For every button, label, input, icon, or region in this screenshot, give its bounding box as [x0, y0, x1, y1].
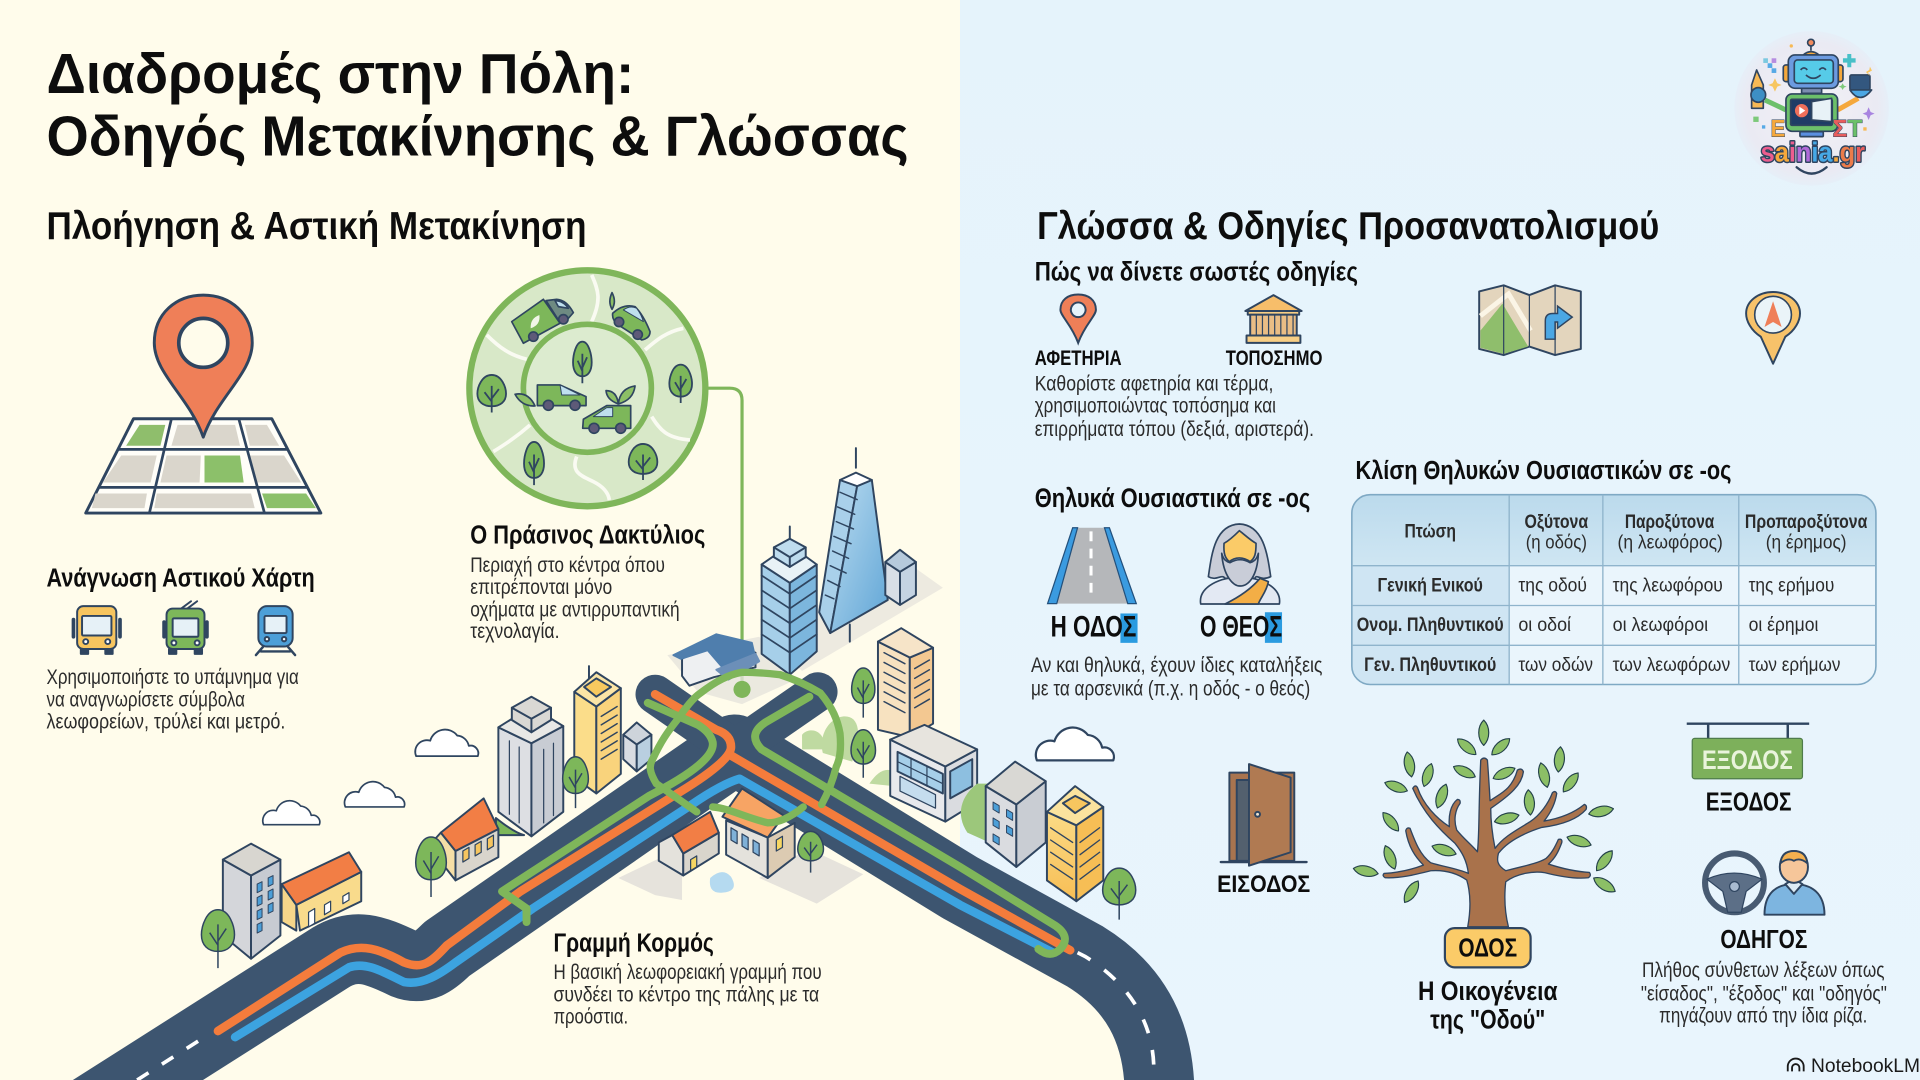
icon: exit sign: ΕΞΟΔΟΣ [1702, 745, 1793, 775]
building: grey tower [498, 697, 563, 836]
heading: green ring: Ο Πράσινος Δακτύλιος [470, 522, 705, 550]
label: landmark: ΤΟΠΟΣΗΜΟ [1226, 347, 1322, 370]
table header: Παροξύτονα [1625, 511, 1714, 533]
table row: nominative plural: οι οδοί [1518, 614, 1572, 636]
label: start: ΑΦΕΤΗΡΙΑ [1035, 347, 1122, 370]
label: driver: ΟΔΗΓΟΣ [1720, 926, 1807, 954]
icon: temple landmark [1245, 295, 1302, 343]
caption: word family: της "Οδού" [1430, 1005, 1545, 1035]
table row: genitive singular [1378, 574, 1834, 596]
cloud [344, 782, 405, 807]
vehicle: van [515, 385, 586, 410]
cloud [415, 730, 478, 756]
icon: road [1048, 528, 1136, 604]
text: directions description: επιρρήματα τόπου (δεξιά, αριστερά). [1035, 418, 1314, 441]
title [47, 42, 909, 168]
icon: god figure [1200, 524, 1280, 604]
heading: how to give directions: Πώς να δίνετε σωστές οδηγίες [1035, 256, 1358, 286]
table header: Πτώση [1404, 521, 1456, 543]
text: compound words description [1641, 959, 1887, 1027]
ring anchor dot [733, 681, 751, 698]
ground pads [618, 557, 943, 904]
text: directions description [1035, 373, 1314, 441]
table header [1404, 511, 1867, 554]
road [69, 692, 1160, 1080]
text: green ring description: οχήματα με αντιρρυπαντική [470, 599, 680, 622]
root box [1445, 928, 1531, 967]
icon: folded map with arrow [1479, 285, 1581, 355]
table row: genitive plural: Γεν. Πληθυντικού [1364, 654, 1496, 676]
building: glass block [890, 725, 977, 822]
caption: word family [1418, 976, 1558, 1035]
table header: (η λεωφόρος) [1618, 532, 1723, 554]
heading: navigation and urban mobility: Πλοήγηση & Αστική Μετακίνηση [47, 205, 587, 248]
icon: metro [256, 606, 295, 655]
building: blue tower [762, 527, 817, 675]
heading: language and directions: Γλώσσα & Οδηγίες Προσανατολισμού [1037, 205, 1659, 248]
icon: word family tree [1352, 720, 1618, 927]
panel: left city navigation [47, 42, 1160, 1080]
text: trunk line description [553, 961, 822, 1029]
blue pavilion [673, 634, 759, 686]
blue line [235, 779, 1053, 1037]
text: green ring description [470, 554, 680, 643]
building: small grey [623, 722, 651, 771]
table row: genitive plural: των λεωφόρων [1613, 654, 1730, 676]
pond [710, 872, 734, 893]
logo: sainia.gr robot [1734, 31, 1889, 186]
heading: declension table: Κλίση Θηλυκών Ουσιαστικών σε -ος [1356, 457, 1731, 485]
table header: Προπαροξύτονα [1745, 511, 1867, 533]
connector line: ring to city [708, 388, 742, 686]
icon: start pin [1060, 294, 1096, 343]
house: two storey [722, 789, 795, 878]
house: orange small [659, 812, 719, 876]
table: declension [1352, 495, 1876, 684]
bushes [802, 716, 894, 786]
heading: feminine nouns: Θηλυκά Ουσιαστικά σε -ος [1035, 483, 1310, 513]
icon: exit sign [1687, 724, 1809, 779]
title: Οδηγός Μετακίνησης & Γλώσσας [47, 105, 909, 168]
table row: genitive plural: των οδών [1518, 654, 1593, 676]
table row: nominative plural: Ονομ. Πληθυντικού [1357, 614, 1504, 636]
table row: genitive plural: των ερήμων [1749, 654, 1841, 676]
text: directions description: Καθορίστε αφετηρία και τέρμα, [1035, 373, 1273, 396]
wordmark: sainia.gr [1761, 136, 1865, 167]
text: feminine nouns description: με τα αρσενικά (π.χ. η οδός - ο θεός) [1031, 678, 1310, 701]
letters: Ε [1771, 116, 1785, 143]
bush [961, 784, 989, 842]
icon: door [1221, 764, 1307, 866]
road dashes [137, 953, 1154, 1080]
text: compound words description: πηγάζουν από την ίδια ρίζα. [1659, 1004, 1867, 1027]
icon: steering wheel and driver [1705, 851, 1824, 915]
panel: right language [1031, 31, 1920, 1077]
table header: Οξύτονα [1524, 511, 1588, 533]
tree [201, 910, 234, 968]
vehicle: truck [512, 299, 573, 343]
table header: (η έρημος) [1766, 532, 1847, 554]
title: Διαδρομές στην Πόλη: [47, 42, 634, 105]
heading: trunk line: Γραμμή Κορμός [553, 929, 714, 957]
root box: ΟΔΟΣ [1458, 934, 1517, 962]
letters: Τ [1848, 116, 1863, 143]
text: directions description: χρησιμοποιώντας τοπόσημα και [1035, 395, 1276, 418]
tree [852, 668, 875, 718]
table row: genitive singular: της οδού [1518, 574, 1587, 596]
text: map legend: λεωφορείων, τρύλεί και μετρό. [47, 711, 285, 734]
cloud [263, 801, 320, 825]
building: yellow house [282, 852, 361, 931]
green zone loop [650, 672, 840, 823]
text: trunk line description: συνδέει το κέντρο της πάλης με τα [553, 984, 819, 1007]
trunk and branches [1383, 758, 1590, 927]
text: map legend [47, 666, 299, 734]
building: orange roof house [429, 798, 524, 880]
icon: green ring zone [469, 270, 705, 506]
building: grey apartments [986, 762, 1046, 867]
text: trunk line description: προόστια. [553, 1006, 628, 1029]
letters [1771, 116, 1863, 143]
orange line [218, 694, 1070, 1031]
building: beige tower [878, 628, 933, 737]
label: entrance: ΕΙΣΟΔΟΣ [1217, 871, 1310, 898]
icon: bus [73, 606, 120, 654]
tree [563, 757, 588, 808]
building: yellow tower [574, 666, 621, 793]
letters: Σ [1833, 116, 1847, 143]
table row: nominative plural: οι λεωφόροι [1613, 614, 1708, 636]
tree [798, 831, 823, 873]
building: grey block [223, 844, 280, 959]
illustration: isometric city and road [69, 448, 1160, 1080]
table row: genitive singular: της λεωφόρου [1613, 574, 1723, 596]
green line [502, 697, 1065, 954]
table row: nominative plural: οι έρημοι [1749, 614, 1818, 636]
tree [416, 837, 446, 897]
table row: genitive singular: Γενική Ενικού [1378, 574, 1483, 596]
text: feminine nouns description: Αν και θηλυκά, έχουν ίδιες καταλήξεις [1031, 654, 1322, 677]
icon: trolley [164, 601, 207, 654]
text: map legend: να αναγνωρίσετε σύμβολα [47, 689, 245, 712]
tree [1103, 868, 1136, 920]
building: glass spire [819, 448, 888, 642]
watermark: NotebookLM: NotebookLM [1811, 1055, 1920, 1077]
table row: genitive singular: της ερήμου [1749, 574, 1834, 596]
table header: (η οδός) [1526, 532, 1587, 554]
text: green ring description: επιτρέπονται μόνο [470, 576, 612, 599]
word: O THEOS with highlighted ending: Ο ΘΕΟΣ [1200, 611, 1282, 644]
text: green ring description: τεχνολαγία. [470, 620, 560, 643]
word: H ODOS with highlighted ending: Η ΟΔΟΣ [1051, 611, 1136, 644]
vehicle: car with leaf [610, 293, 650, 340]
icon: map with location pin [86, 295, 321, 513]
cloud [1036, 728, 1114, 760]
heading: reading the city map: Ανάγνωση Αστικού Χάρτη [47, 565, 315, 593]
vehicle: small van with sprout [583, 386, 635, 433]
leaves [1352, 720, 1618, 905]
building: small kiosk [885, 550, 916, 605]
sparkles [1753, 44, 1875, 131]
text: map legend: Χρησιμοποιήστε το υπάμνημα για [47, 666, 299, 689]
table row: genitive plural [1364, 654, 1841, 676]
icon: compass pin [1746, 292, 1800, 364]
table row: nominative plural [1357, 614, 1818, 636]
text: green ring description: Περιαχή στο κέντρα όπου [470, 554, 665, 577]
text: feminine nouns description [1031, 654, 1322, 701]
robot [1751, 39, 1872, 137]
caption: word family: Η Οικογένεια [1418, 976, 1558, 1006]
text: trunk line description: Η βασική λεωφορειακή γραμμή που [553, 961, 822, 984]
building: amber tower [1047, 786, 1103, 901]
label: exit: ΕΞΟΔΟΣ [1706, 789, 1791, 817]
tree [851, 730, 876, 778]
